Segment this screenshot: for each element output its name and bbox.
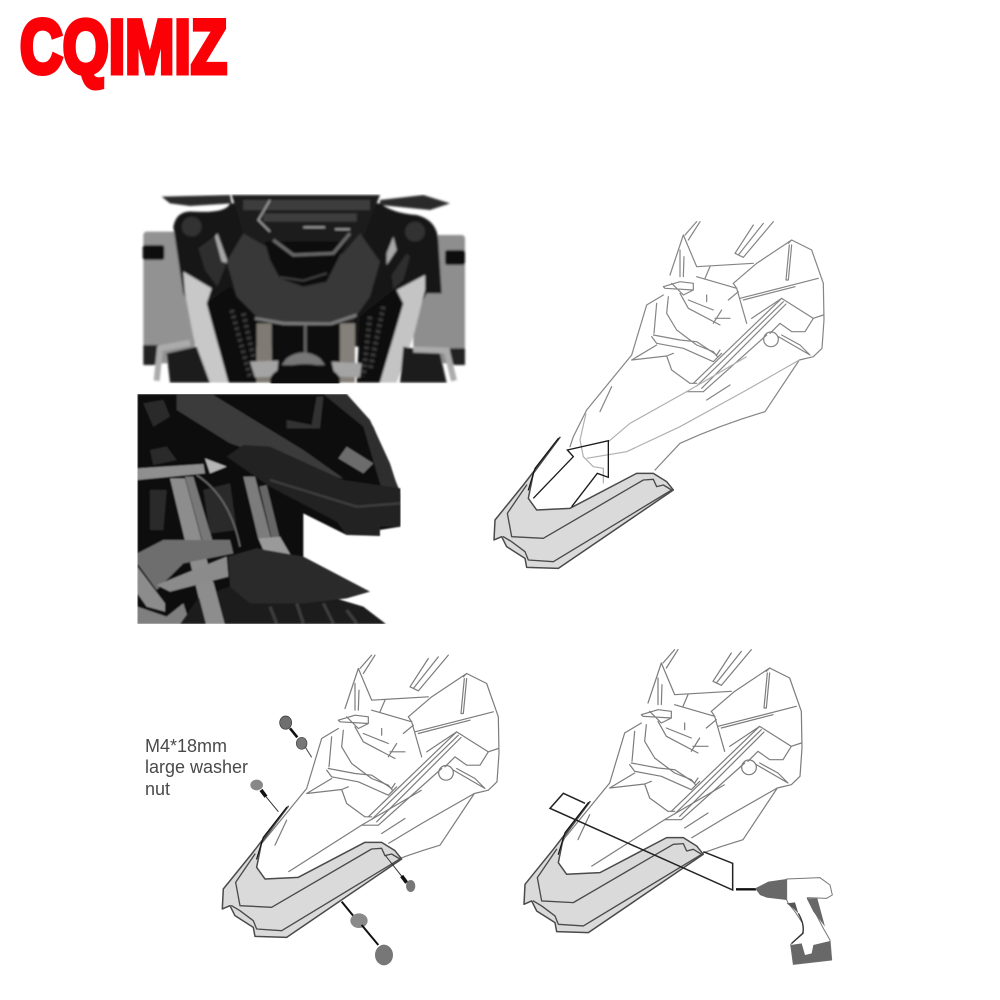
drill guide template: [550, 793, 733, 890]
fork and radiator centre: [272, 325, 340, 383]
clutter detail: [143, 400, 237, 533]
fork tubes: [168, 477, 214, 599]
motorcycle outline: [570, 222, 824, 470]
drill: [736, 878, 832, 964]
top bolt and washer: [280, 716, 312, 757]
lower left bodywork: [137, 540, 233, 590]
left bolt: [250, 780, 278, 812]
photo: fender extension side view: [137, 394, 401, 624]
diagram: drilling the fender: [524, 650, 832, 964]
radiators: [207, 287, 403, 383]
logo: CQIMIZ: CQIMIZ: [20, 5, 227, 90]
motorcycle outline: [245, 655, 499, 903]
photo: motorcycle front view: [143, 195, 465, 397]
front mudguard: [228, 548, 370, 603]
beak: [227, 233, 380, 325]
winglets: [198, 233, 410, 289]
crash bars: [167, 347, 447, 383]
pannier cases: [143, 232, 465, 365]
fender part: [222, 806, 402, 937]
windshield: [324, 394, 400, 502]
right bolt: [385, 855, 415, 892]
fender part: [494, 437, 673, 568]
lower fork tube: [195, 582, 225, 624]
headlight: [232, 195, 380, 257]
fastener label: M4*18mm: [145, 736, 227, 756]
motorcycle outline: [548, 650, 802, 898]
diagram: fender fitted with arrow: [494, 222, 824, 568]
side fairings: [183, 272, 228, 383]
beak arm: [177, 395, 343, 478]
lower nut and washer: [342, 902, 393, 965]
tire: [180, 587, 386, 624]
faded lower contour: [580, 357, 799, 483]
fastener label: large washer: [145, 757, 248, 777]
beak extension: [227, 445, 401, 536]
turn signals: [162, 195, 450, 210]
fender part: [524, 802, 703, 933]
lamps and dark frame: [173, 203, 442, 347]
fastener label: nut: [145, 779, 170, 799]
dark background: [137, 394, 401, 624]
diagram: bolting the fender: [145, 655, 499, 965]
fasteners: [250, 716, 415, 965]
upward arrow: [533, 441, 608, 507]
